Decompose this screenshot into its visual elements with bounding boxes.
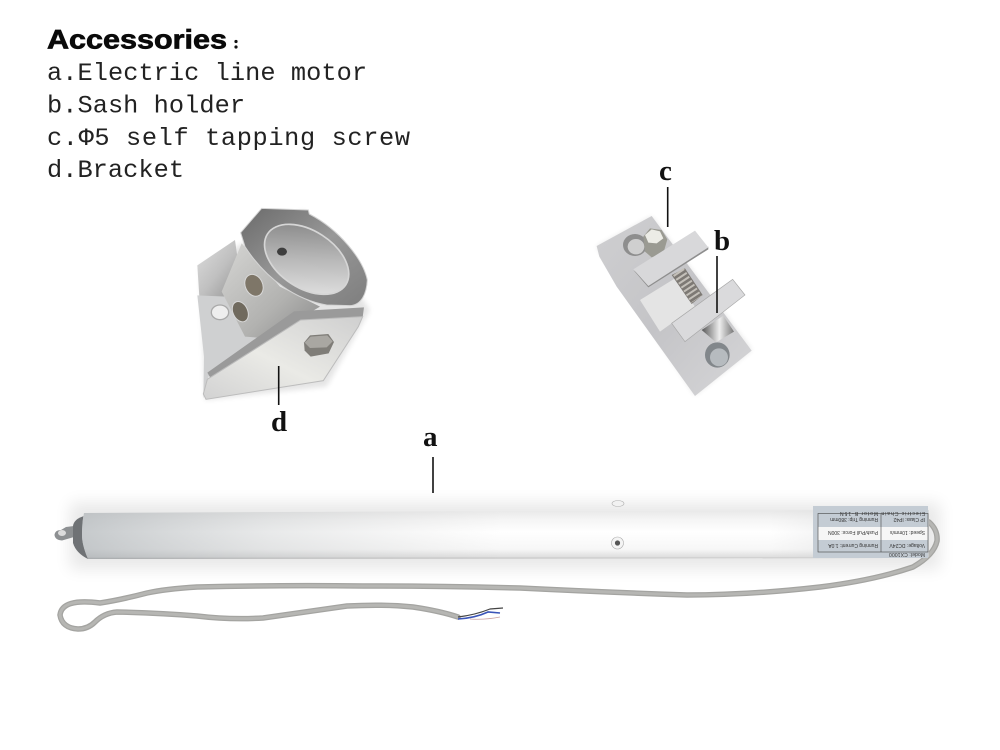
rivet bottom: [612, 537, 624, 549]
tube body: [82, 510, 929, 559]
end cap: [73, 516, 88, 559]
spec label: Speed: 10mm/s: [889, 529, 925, 535]
base plate: [197, 295, 260, 398]
heading: Accessories: Accessories: [47, 24, 227, 54]
screw hole lower: [229, 299, 251, 324]
text block: accessories list: d.Bracket: [47, 156, 184, 185]
clamp ring: [241, 208, 367, 306]
upper mounting hole: [623, 234, 647, 256]
upper block: [633, 231, 708, 286]
spec label: Voltage: DC24V: [889, 542, 925, 548]
rivet top: [612, 500, 624, 506]
text block: accessories list: [47, 59, 410, 185]
clamp cylinder: [222, 243, 320, 338]
label: a: a: [423, 421, 438, 453]
leader line: b: [716, 256, 718, 313]
spec label: Running Current: 1.0A: [828, 542, 878, 548]
rod end: [702, 316, 734, 342]
label: d: d: [271, 406, 287, 438]
icon: sash holder photo: [597, 216, 752, 396]
front plate flange: [207, 307, 364, 380]
upper block side: [633, 247, 708, 287]
power cable: [60, 522, 937, 629]
text block: accessories list: c.Φ5 self tapping screw: [47, 124, 410, 153]
threaded screw: [672, 268, 703, 304]
cable wires: [458, 608, 503, 619]
lower block: [672, 279, 745, 342]
base plate: [597, 216, 752, 396]
spec label: Electric Chain Motor B-15N: [840, 510, 925, 516]
nut: [643, 228, 667, 257]
icon: bracket photo: [197, 208, 370, 400]
front plate: [203, 317, 363, 399]
lower mounting hole: [705, 342, 730, 368]
spec label: Model: CX1000: [889, 551, 925, 557]
leader line: d: [278, 366, 280, 405]
icon: electric line motor photo: [54, 500, 940, 629]
ring bore: [252, 210, 361, 309]
text block: accessories list: a.Electric line motor: [47, 59, 367, 88]
spec label: Push/Pull Force: 300N: [828, 529, 878, 535]
bolt: [304, 334, 334, 357]
back plate: [197, 240, 243, 300]
label: b: b: [714, 225, 730, 257]
inner wall: [640, 278, 695, 332]
spec label: Running Trip: 380mm: [830, 516, 878, 522]
spec label: [813, 506, 928, 558]
tube left shading: [82, 511, 500, 559]
ring bore hole: [277, 248, 287, 256]
text block: accessories list: b.Sash holder: [47, 92, 245, 120]
tube right shading: [770, 510, 929, 557]
screw hole upper: [241, 271, 267, 299]
spec label: IP Class: IP42: [893, 516, 925, 522]
leader line: c: [667, 187, 669, 227]
label: c: c: [659, 155, 672, 187]
shaft knob: [54, 526, 74, 540]
base plate hole: [211, 305, 229, 320]
leader line: a: [432, 457, 434, 493]
